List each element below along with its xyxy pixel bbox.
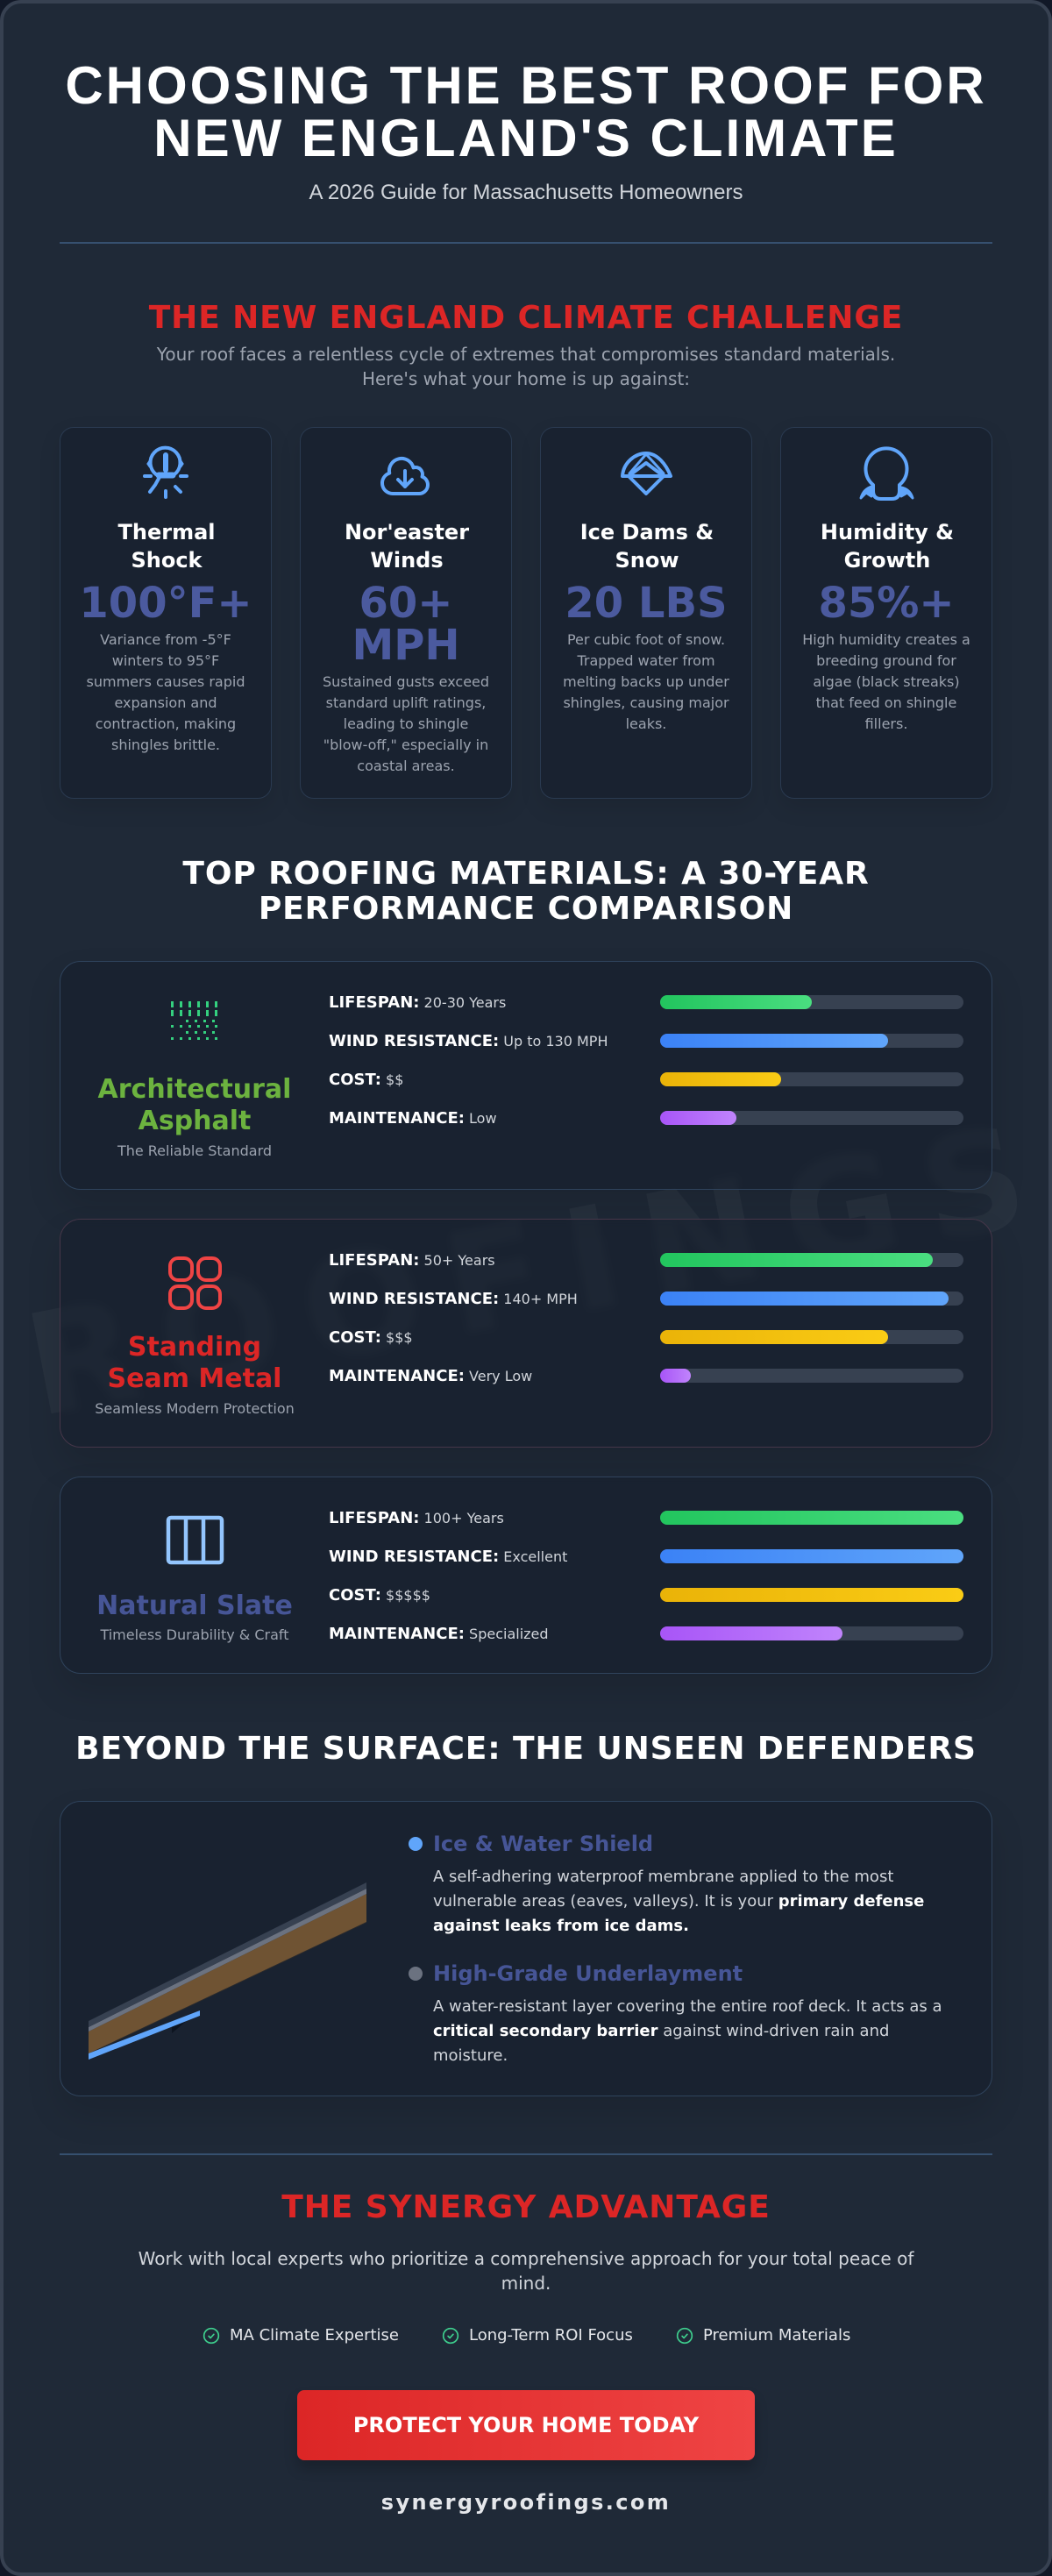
icon: ice dam	[621, 452, 673, 496]
card title: Ice Dams &	[580, 520, 714, 544]
bullet: underlayment	[409, 1967, 423, 1981]
statistic: 60+	[359, 579, 452, 628]
card title: Nor'easter	[345, 520, 469, 544]
text: underlayment: A water-resistant layer covering the entire roof deck. It acts as a critical secondary barrier against wind-driven rain and moisture.	[433, 1997, 942, 2065]
description: Per cubic foot of snow. Trapped water from melting backs up under shingles, causing major leaks.	[563, 631, 729, 732]
call to action button	[297, 2390, 755, 2460]
material tagline: Seamless Modern Protection	[95, 1400, 295, 1417]
spec rows: LIFESPAN: 20-30 Years	[329, 993, 506, 1012]
material name: Natural Slate	[96, 1590, 293, 1621]
statistic: 20 LBS	[565, 579, 728, 628]
description: High humidity creates a breeding ground for algae (black streaks) that feed on shingle fillers.	[802, 631, 970, 732]
heading: materials comparison: TOP ROOFING MATERIALS: A 30-YEAR	[182, 856, 870, 892]
statistic: MPH	[352, 621, 460, 670]
material name: Standing	[128, 1332, 261, 1363]
card title	[821, 520, 954, 573]
spec rows: LIFESPAN: 100+ Years	[329, 1509, 504, 1527]
panel: architectural asphalt	[60, 961, 992, 1190]
card title: Humidity &	[821, 520, 954, 544]
card title	[580, 520, 714, 573]
icon: metal panels	[168, 1256, 222, 1310]
title: CHOOSING THE BEST ROOF FOR	[65, 56, 987, 115]
material name	[98, 1074, 291, 1136]
spec rows	[329, 1509, 963, 1643]
panel: ice dams	[540, 427, 752, 799]
spec rows: LIFESPAN: 50+ Years	[329, 1251, 495, 1270]
roof cross-section diagram	[89, 1882, 366, 2060]
spec rows: WIND RESISTANCE: Up to 130 MPH	[329, 1032, 608, 1050]
spec rows: COST: $$$$$	[329, 1586, 430, 1605]
spec rows: WIND RESISTANCE: 140+ MPH	[329, 1290, 578, 1308]
spec rows: WIND RESISTANCE: Excellent	[329, 1548, 567, 1566]
spec rows	[329, 993, 963, 1128]
icon: thermal shock	[143, 445, 188, 499]
card title: Shock	[131, 548, 203, 573]
card title	[117, 520, 216, 573]
description: Variance from -5°F winters to 95°F summers causes rapid expansion and contraction, making shingles brittle.	[86, 631, 245, 753]
statistic: 85%+	[818, 579, 955, 628]
statistic	[352, 579, 460, 670]
check: long-term roi: Long-Term ROI Focus	[469, 2326, 633, 2345]
material tagline: Timeless Durability & Craft	[100, 1626, 289, 1643]
title	[65, 56, 987, 167]
intro text	[156, 344, 895, 389]
check: premium materials: Premium Materials	[703, 2326, 850, 2345]
panel: humidity	[780, 427, 992, 799]
heading: synergy advantage: THE SYNERGY ADVANTAGE	[281, 2189, 771, 2225]
card title: Growth	[844, 548, 930, 573]
statistic: 100°F+	[79, 579, 252, 628]
material name: Seam Metal	[107, 1363, 281, 1394]
check: ma climate expertise: MA Climate Expertise	[230, 2326, 399, 2345]
icon: cloud download	[380, 456, 430, 495]
spec rows	[329, 1251, 963, 1385]
spec rows: MAINTENANCE: Specialized	[329, 1625, 549, 1643]
spec rows: COST: $$	[329, 1071, 403, 1089]
spec rows: COST: $$$	[329, 1328, 413, 1347]
heading: materials comparison: PERFORMANCE COMPARISON	[259, 891, 793, 927]
material name: Asphalt	[139, 1106, 251, 1136]
intro text: Here's what your home is up against:	[362, 368, 690, 389]
website: synergyroofings.com	[381, 2490, 671, 2515]
spec rows: MAINTENANCE: Very Low	[329, 1367, 532, 1385]
material name	[107, 1332, 281, 1394]
text: ice and water shield: A self-adhering waterproof membrane applied to the most vulnerable areas (eaves, valleys). It is your primary defense against leaks from ice dams.	[433, 1868, 924, 1935]
panel: unseen defenders	[60, 1801, 992, 2096]
material tagline: The Reliable Standard	[117, 1142, 272, 1159]
title: NEW ENGLAND'S CLIMATE	[153, 109, 899, 167]
icon: humidity	[859, 446, 913, 501]
panel: standing seam metal	[60, 1219, 992, 1448]
material name: Architectural	[98, 1074, 291, 1105]
panel: natural slate	[60, 1477, 992, 1674]
card title: Snow	[615, 548, 679, 573]
spec rows: MAINTENANCE: Low	[329, 1109, 497, 1128]
call to action button: PROTECT YOUR HOME TODAY	[353, 2413, 699, 2437]
text: synergy advantage: Work with local experts who prioritize a comprehensive approach for your total peace of mind.	[139, 2248, 913, 2294]
card title: Thermal	[117, 520, 216, 544]
subheading: underlayment: High-Grade Underlayment	[433, 1961, 743, 1986]
panel: noreaster winds	[300, 427, 512, 799]
subtitle: A 2026 Guide for Massachusetts Homeowners	[309, 181, 743, 204]
heading: materials comparison	[182, 856, 870, 927]
description: Sustained gusts exceed standard uplift ratings, leading to shingle "blow-off," especially in coastal areas.	[323, 673, 489, 774]
card title: Winds	[370, 548, 444, 573]
bullet: ice and water shield	[409, 1837, 423, 1851]
icon: asphalt granules	[171, 1001, 217, 1040]
card title	[345, 520, 470, 573]
icon: slate tiles	[167, 1515, 224, 1564]
subheading: ice and water shield: Ice & Water Shield	[433, 1832, 653, 1856]
watermark: ROOFINGS	[14, 1090, 1052, 1448]
heading: unseen defenders: BEYOND THE SURFACE: THE UNSEEN DEFENDERS	[75, 1731, 977, 1767]
panel: thermal shock	[60, 427, 272, 799]
heading: climate challenge: THE NEW ENGLAND CLIMATE CHALLENGE	[149, 300, 903, 336]
intro text: Your roof faces a relentless cycle of extremes that compromises standard materials.	[157, 344, 895, 365]
